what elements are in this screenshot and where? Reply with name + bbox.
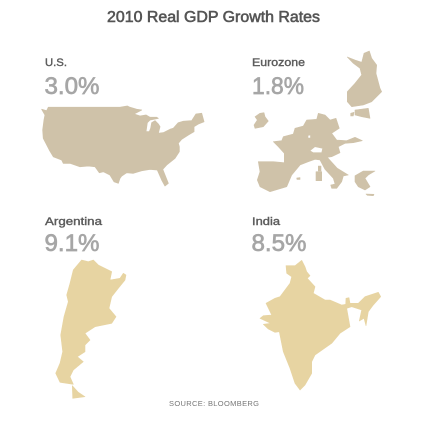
value: Eurozone growth rate: 1.8% <box>252 73 304 100</box>
label: India: India <box>252 216 281 228</box>
panel: India <box>252 216 381 390</box>
map: India <box>260 260 381 390</box>
label: Argentina: Argentina <box>45 216 103 228</box>
label: U.S.: U.S. <box>45 57 67 69</box>
panel: Eurozone <box>252 51 382 196</box>
map: United States <box>42 106 204 186</box>
value: India growth rate: 8.5% <box>252 230 306 257</box>
map: Eurozone countries <box>254 51 382 196</box>
source note: SOURCE: BLOOMBERG <box>169 399 259 408</box>
panel: U.S. <box>42 57 204 186</box>
panel: Argentina <box>44 216 126 398</box>
map: Argentina <box>56 260 126 398</box>
title: 2010 Real GDP Growth Rates <box>107 9 320 26</box>
value: U.S. growth rate: 3.0% <box>44 73 100 100</box>
label: Eurozone: Eurozone <box>252 57 305 69</box>
value: Argentina growth rate: 9.1% <box>44 230 100 257</box>
